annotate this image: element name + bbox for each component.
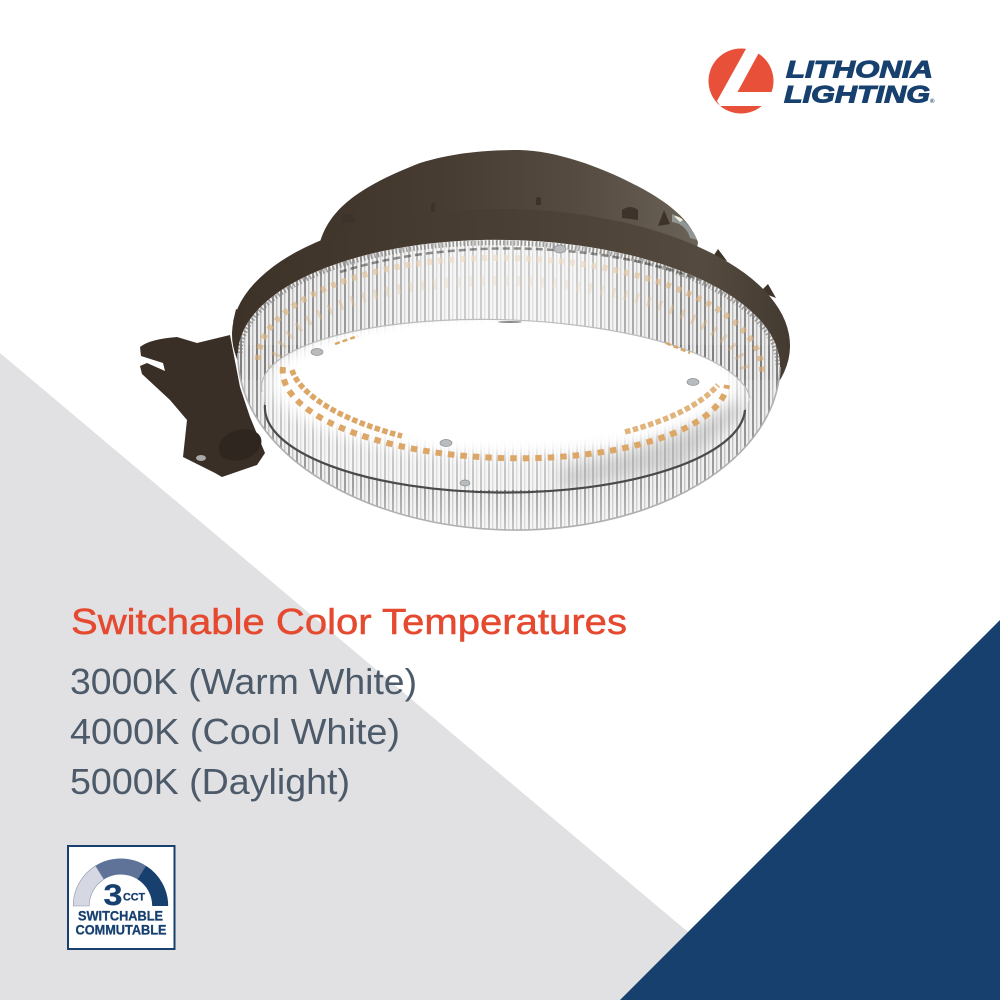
heading: Switchable Color Temperatures [71,601,627,642]
lens lower seam [265,405,745,493]
color temperature list: 5000K (Daylight) [70,761,350,802]
housing dome [318,150,698,300]
badge text: SWITCHABLE [78,908,163,924]
lens screws [311,245,699,486]
logo wordmark: LIGHTING [784,82,930,108]
color temperature list: 3000K (Warm White) [70,661,417,702]
badge text: COMMUTABLE [76,922,166,938]
logo: Lithonia Lighting [708,47,935,114]
inner lens disc [261,318,750,492]
logo wordmark: ® [930,98,935,105]
upper LED rows seen through lens [258,258,762,378]
badge text: 3 [104,879,122,912]
lens bottom shading [238,380,780,532]
badge: 3CCT switchable [68,846,174,949]
gauge arc [73,858,168,906]
gray diagonal panel [0,353,688,1000]
mounting bracket [140,335,266,477]
logo wordmark [784,56,935,108]
logo wordmark: LITHONIA [786,56,933,84]
color temperature list [70,661,417,802]
logo mark: red circle with white L [708,47,776,114]
color temperature list: 4000K (Cool White) [70,711,400,752]
badge text: CCT [123,892,145,904]
lens top edge [240,243,778,367]
blue corner triangle [620,620,1000,1000]
badge text [76,879,166,938]
housing rim [232,209,790,470]
outer lens with ribbed fins [230,235,790,532]
product photo: LED area light [140,150,790,532]
LED strip [283,336,727,458]
